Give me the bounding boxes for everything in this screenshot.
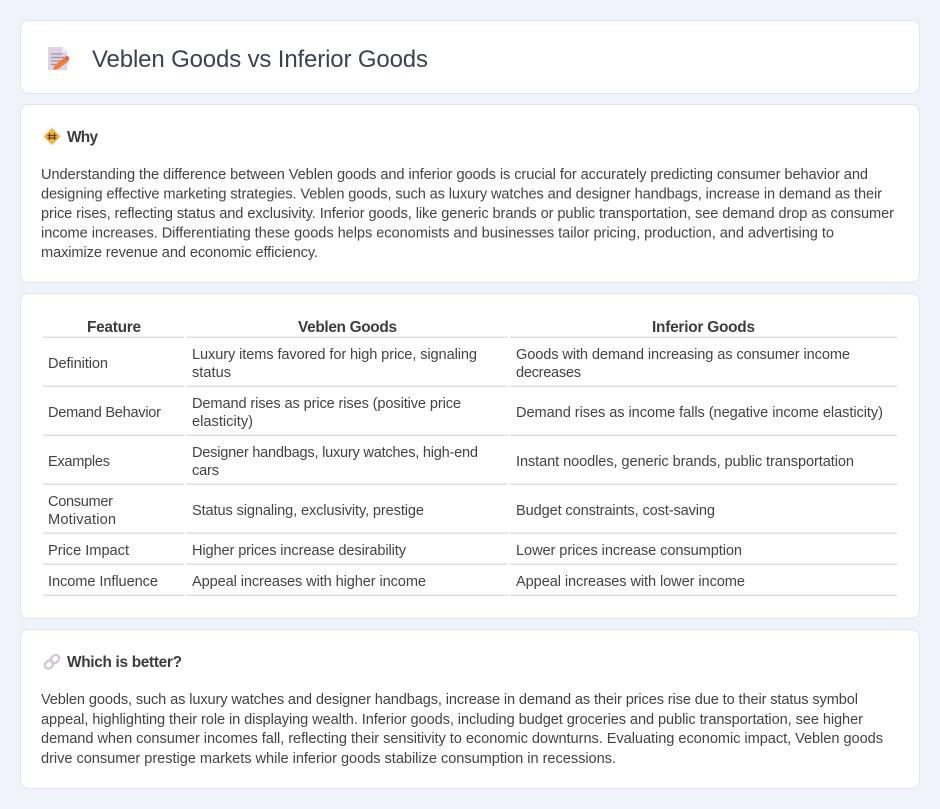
table row: definition: [43, 347, 897, 387]
text block: which is better paragraph: Veblen goods, such as luxury watches and designer handbags, increase in demand as their prices rise due to their status symbol: [41, 692, 858, 708]
text block: why paragraph: price rises, reflecting status and exclusivity. Inferior goods, like generic brands or public transportation, see demand drop as consumer: [41, 206, 894, 222]
table row: price impact: Higher prices increase desirability: [192, 543, 407, 559]
table row: definition: Definition: [48, 356, 108, 372]
table row: price impact: Price Impact: [48, 543, 129, 559]
table row: examples: cars: [192, 463, 219, 479]
text block: which is better paragraph: demand when consumer incomes fall, reflecting their sensitivity to economic downturns. Evaluating economic impact, Veblen goods: [41, 731, 883, 747]
icon: chain link: [43, 653, 61, 670]
heading: which is better: Which is better?: [67, 654, 182, 671]
table row: examples: Designer handbags, luxury watches, high-end: [192, 445, 478, 461]
table row: price impact: [43, 543, 897, 565]
table row: consumer motivation: Consumer: [48, 494, 113, 510]
table row: definition: status: [192, 365, 231, 381]
table row: examples: Examples: [48, 454, 110, 470]
table row: income influence: Income Influence: [48, 574, 158, 590]
panel: comparison table: [20, 294, 920, 618]
text block: why paragraph: maximize revenue and economic efficiency.: [41, 245, 318, 261]
panel: title header: [20, 20, 920, 94]
icon: orange diamond sign: [44, 128, 60, 145]
table row: income influence: [43, 574, 897, 596]
table row: demand behavior: elasticity): [192, 414, 253, 430]
table row: demand behavior: Demand rises as income falls (negative income elasticity): [516, 405, 883, 421]
table row: examples: Instant noodles, generic brands, public transportation: [516, 454, 854, 470]
table header row: [43, 319, 897, 338]
title: Veblen Goods vs Inferior Goods: [92, 46, 428, 73]
table row: demand behavior: [43, 396, 897, 436]
table row: consumer motivation: Motivation: [48, 512, 116, 528]
table row: definition: decreases: [516, 365, 581, 381]
text block: which is better paragraph: drive consumer prestige markets while inferior goods stabilize consumption in recessions.: [41, 751, 616, 767]
text block: why paragraph: income increases. Differentiating these goods helps economists and businesses tailor pricing, production, and advertising to: [41, 226, 834, 242]
table header row: Inferior Goods: [652, 319, 755, 336]
panel: why: [20, 104, 920, 282]
text block: which is better paragraph: [41, 692, 883, 767]
table row: consumer motivation: Status signaling, exclusivity, prestige: [192, 503, 424, 519]
table header row: Veblen Goods: [298, 319, 397, 336]
table row: examples: [43, 445, 897, 485]
panel: which is better: [20, 630, 920, 788]
table row: income influence: Appeal increases with higher income: [192, 574, 426, 590]
table row: price impact: Lower prices increase consumption: [516, 543, 742, 559]
text block: why paragraph: Understanding the difference between Veblen goods and inferior goods is crucial for accurately predicting consumer behavior and: [41, 167, 868, 183]
text block: why paragraph: designing effective marketing strategies. Veblen goods, such as luxury watches and designer handbags, increase in demand as their: [41, 186, 882, 202]
table header row: Feature: [87, 319, 141, 336]
table row: definition: Goods with demand increasing as consumer income: [516, 347, 850, 363]
text block: why paragraph: [41, 167, 894, 261]
text block: which is better paragraph: appeal, highlighting their role in displaying wealth. Inferior goods, including budget groceries and public transportation, see higher: [41, 712, 863, 728]
table row: demand behavior: Demand Behavior: [48, 405, 161, 421]
table row: definition: Luxury items favored for high price, signaling: [192, 347, 477, 363]
icon: document with pencil: [48, 47, 70, 70]
table row: demand behavior: Demand rises as price rises (positive price: [192, 396, 461, 412]
table row: consumer motivation: Budget constraints, cost-saving: [516, 503, 715, 519]
table row: consumer motivation: [43, 494, 897, 534]
table row: income influence: Appeal increases with lower income: [516, 574, 745, 590]
heading: why: Why: [67, 129, 98, 146]
